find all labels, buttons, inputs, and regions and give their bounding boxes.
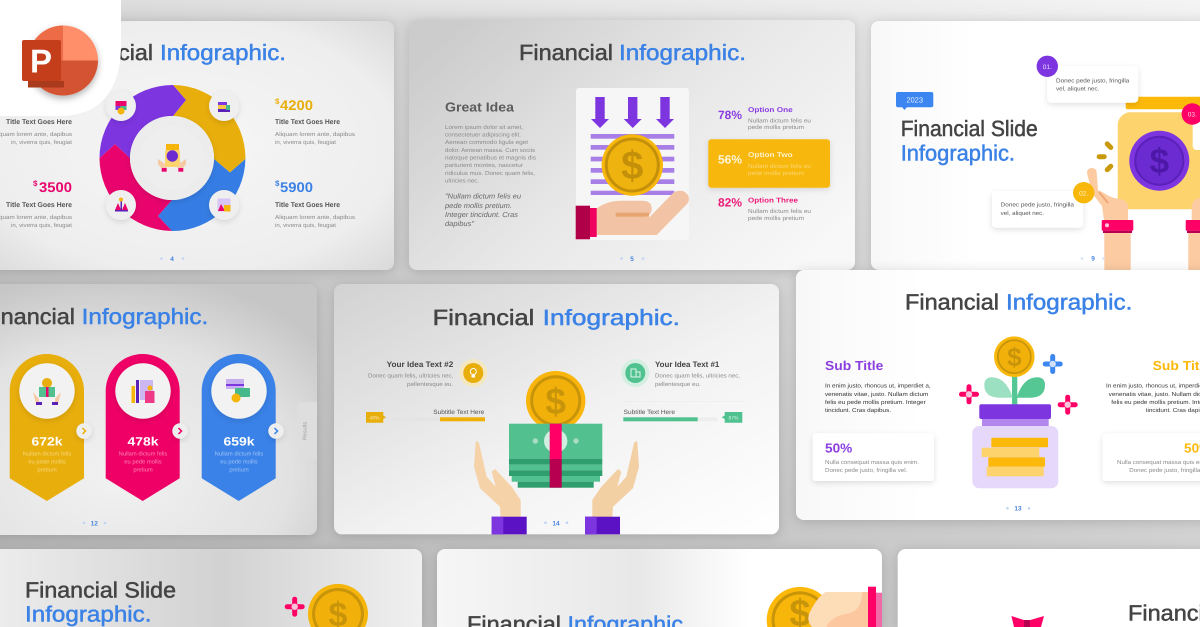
card: 478k: pretium (133, 467, 153, 474)
left stat card: 50% (825, 441, 853, 456)
page number (1006, 506, 1030, 513)
title (905, 289, 1132, 314)
tab: results (297, 402, 317, 459)
icon: top-right badge (209, 91, 239, 121)
heading: Financial Slide (25, 577, 176, 602)
panel: bottom-left slide (0, 549, 422, 627)
panel: slide 14 progress (334, 284, 779, 534)
card: 672k: 672k (32, 434, 63, 448)
text: great idea: dapibus" (445, 219, 474, 228)
idea 1 (621, 359, 740, 388)
chart: four arrow ring (100, 85, 245, 231)
option three (718, 196, 811, 222)
title: Infographic. (1006, 289, 1132, 314)
progress bar: 87%: Subtitle Text Here (624, 409, 676, 416)
card: 478k: 478k (128, 434, 159, 448)
right column text: venenatis vitae, justo. Nullam dictum (1109, 391, 1200, 398)
left column text: felis eu pede mollis pretium. Integer (825, 399, 926, 406)
icon: bottom-right badge (209, 190, 239, 220)
option one: 78% (718, 108, 742, 122)
text: great idea: dolor. Aenean massa. Cum sociis (445, 147, 535, 154)
icon: building (621, 359, 649, 387)
panel: slide 12 cards (0, 284, 317, 535)
stat: 4200: in, viverra quis, feugiat (275, 139, 336, 146)
card: 672k: pretium (37, 467, 57, 474)
option three: pede mollis pretium (748, 215, 804, 222)
page number (1081, 256, 1105, 262)
text: great idea: Integer tincidunt. Cras (445, 210, 518, 219)
illustration: coin on money between hands: $ (545, 381, 566, 422)
page number: 9 (1091, 256, 1095, 262)
progress bar: 87% (623, 409, 742, 423)
progress bar: 48%: Subtitle Text Here (433, 409, 485, 416)
callout 02: vel, aliquet nec. (1001, 210, 1044, 217)
page number (620, 256, 644, 263)
page number (83, 520, 106, 527)
text: top-left block: Title Text Goes Here (6, 118, 72, 126)
title: Financial (905, 289, 999, 314)
icon: coin (308, 584, 368, 627)
card: 659k: Nullam dictum felis (215, 451, 263, 458)
card: 672k: eu pede mollis (28, 459, 66, 466)
icon: top-left badge (106, 91, 136, 121)
tag: 2023: 2023 (906, 96, 923, 105)
card: 659k: pretium (229, 467, 249, 474)
text: great idea: natoque penatibus et magnis dis (445, 154, 536, 162)
panel: bottom-right slide (898, 549, 1200, 627)
icon: blue flower (1043, 354, 1063, 374)
text: great idea: consectetuer adipiscing elit. (445, 132, 521, 138)
right stat card (1103, 433, 1200, 481)
page number: 4 (170, 256, 174, 263)
progress bar: 87%: 87% (728, 415, 739, 421)
illustration: hand with coin (767, 587, 882, 627)
callout 02: 02. (1079, 190, 1088, 197)
tab: results: Results (302, 422, 308, 440)
tag: 2023 (896, 92, 933, 110)
icon: pink flower left (959, 384, 979, 404)
option three: Option Three (748, 197, 798, 205)
text: great idea: Aenean commodo ligula eget (445, 139, 528, 146)
title: Infographic. (543, 305, 680, 330)
stat: 4200: 4200 (280, 97, 313, 113)
left column text: In enim justo, rhoncus ut, imperdiet a, (825, 383, 931, 390)
callout 01: vel, aliquet nec. (1056, 85, 1100, 92)
card: 478k: Nullam dictum felis (119, 451, 167, 458)
stat: 4200: Title Text Goes Here (275, 118, 340, 126)
progress bar: 48%: 48% (369, 415, 380, 421)
text: top-left block: in, viverra quis, feugiat (11, 139, 72, 146)
callout 01: Donec pede justo, fringilla (1056, 77, 1130, 84)
stat: 3500: 3500 (39, 179, 72, 195)
icon: card and notes (226, 379, 250, 402)
option one: Nullam dictum felis eu (748, 117, 811, 124)
powerpoint badge (0, 0, 121, 116)
idea 2 (368, 359, 487, 388)
heading: Financial Slide (901, 116, 1038, 141)
stat: 5900: $ (275, 179, 280, 188)
stat: 3500: in, viverra quis, feugiat (11, 222, 72, 229)
option three: 82% (718, 196, 742, 210)
left stat card (813, 433, 934, 481)
callout 01 (1037, 56, 1138, 103)
option three: Nullam dictum felis eu (748, 208, 811, 215)
title (60, 40, 286, 65)
stat: 4200: Aliquam lorem ante, dapibus (275, 131, 355, 138)
left column text: tincidunt. Cras dapibus. (825, 407, 891, 414)
card: 659k: eu pede mollis (220, 459, 258, 466)
left column text: venenatis vitae, justo. Nullam dictum (825, 391, 928, 398)
card: 478k (106, 354, 188, 501)
icon: centre jar with coin (130, 116, 214, 200)
text: great idea: parturient montes, nascetur (445, 162, 523, 169)
title: Infographic. (619, 40, 746, 65)
page number (160, 256, 184, 263)
option two highlight (708, 139, 830, 188)
title: Financial (433, 305, 534, 330)
stat: 4200: $ (275, 97, 280, 106)
card: 478k: eu pede mollis (124, 459, 162, 466)
panel: slide 13 plant jar (796, 270, 1200, 520)
option two highlight: Option Two (748, 151, 793, 159)
heading (25, 577, 176, 627)
right column text (1106, 358, 1200, 414)
page number: 5 (630, 256, 634, 263)
idea 1: Your Idea Text #1 (655, 360, 720, 369)
illustration: coin on money between hands (474, 371, 639, 534)
heading: Infographic. (25, 602, 152, 627)
panel: bottom-centre slide (437, 549, 882, 627)
card: 672k: Nullam dictum felis (23, 451, 71, 458)
page number (544, 520, 568, 527)
callout 02: Donec pede justo, fringilla (1001, 202, 1075, 209)
illustration: hand holding coin (576, 88, 689, 240)
icon: PowerPoint logo: P (30, 42, 52, 80)
card: 659k: 659k (224, 434, 255, 448)
option one: pede mollis pretium (748, 124, 804, 131)
idea 2: Your Idea Text #2 (387, 360, 454, 369)
illustration: plant jar: $ (1007, 342, 1022, 372)
text: top-left block (0, 118, 72, 146)
panel: slide 4 circular infographic (0, 21, 394, 270)
heading (901, 116, 1038, 166)
icon: money and hands (33, 378, 61, 405)
idea 2: pellentesque eu. (407, 381, 454, 388)
stat: 5900: in, viverra quis, feugiat (275, 222, 336, 229)
panel: slide 9 slide infographic (871, 21, 1200, 270)
callout 01: 01. (1043, 64, 1052, 71)
text: great idea: ridiculus mus. Donec quam felis, (445, 170, 535, 177)
icon: documents and calculator (132, 380, 154, 403)
stat: 3500: Title Text Goes Here (6, 201, 72, 209)
idea 1: Donec quam felis, ultricies nec, (655, 373, 740, 380)
icon: bulb (459, 359, 487, 387)
illustration: hand holding coin: $ (621, 144, 643, 188)
title (519, 40, 746, 65)
page number: 12 (91, 520, 98, 527)
left column text: Sub Title (825, 358, 883, 373)
stat: 5900: Title Text Goes Here (275, 201, 340, 209)
stat: 3500: $ (33, 179, 38, 188)
card: 659k (202, 354, 284, 501)
title (433, 305, 680, 330)
illustration: jar and hands (1087, 97, 1200, 270)
stat: 4200 (275, 97, 355, 146)
text: great idea: pede mollis pretium. (444, 201, 512, 210)
panel: slide 5 options (409, 20, 855, 270)
icon: bottom-left badge (106, 190, 136, 220)
text: great idea: ultricies nec. (445, 178, 479, 184)
stat: 3500 (0, 179, 72, 229)
page number: 14 (552, 520, 560, 527)
option two highlight: pede mollis pretium (748, 170, 804, 177)
progress bar: 48% (366, 409, 485, 423)
text: great idea: Great Idea (445, 100, 515, 114)
idea 1: pellentesque eu. (655, 381, 701, 388)
illustration: plant jar (972, 336, 1058, 488)
icon: pink flower (285, 597, 305, 617)
title: Financial (519, 40, 613, 65)
option one: Option One (748, 106, 793, 114)
stat: 5900 (275, 179, 355, 229)
text: great idea (444, 100, 536, 228)
stat: 5900: 5900 (280, 179, 313, 195)
callout 03 (1182, 103, 1200, 150)
option one (718, 106, 811, 131)
title: Infographic. (82, 304, 208, 329)
icon: pink bow (1011, 616, 1044, 627)
title: Infographic. (160, 40, 286, 65)
title: Financial (60, 40, 153, 65)
title (467, 612, 690, 627)
callout 03: 03. (1188, 112, 1197, 119)
heading: Infographic. (901, 141, 1015, 166)
left column text (825, 358, 931, 414)
callout 02 (992, 182, 1094, 228)
right column text: In enim justo, rhoncus ut, imperdiet a, (1106, 383, 1200, 390)
stat: 5900: Aliquam lorem ante, dapibus (275, 214, 355, 221)
card: 672k (10, 354, 92, 501)
text: great idea: Lorem ipsum dolor sit amet, (445, 124, 523, 131)
text: great idea: "Nullam dictum felis eu (445, 192, 521, 201)
option two highlight: Nullam dictum felis eu (748, 163, 811, 170)
title (0, 304, 208, 329)
illustration: jar and hands: $ (1150, 142, 1169, 181)
option two highlight: 56% (718, 152, 742, 166)
page number: 13 (1014, 506, 1022, 513)
idea 2: Donec quam felis, ultricies nec, (368, 373, 454, 380)
left stat card: Donec pede justo, fringilla vel. (825, 467, 908, 474)
icon: pink flower right (1058, 395, 1078, 415)
left stat card: Nulla consequat massa quis enim. (825, 459, 919, 466)
